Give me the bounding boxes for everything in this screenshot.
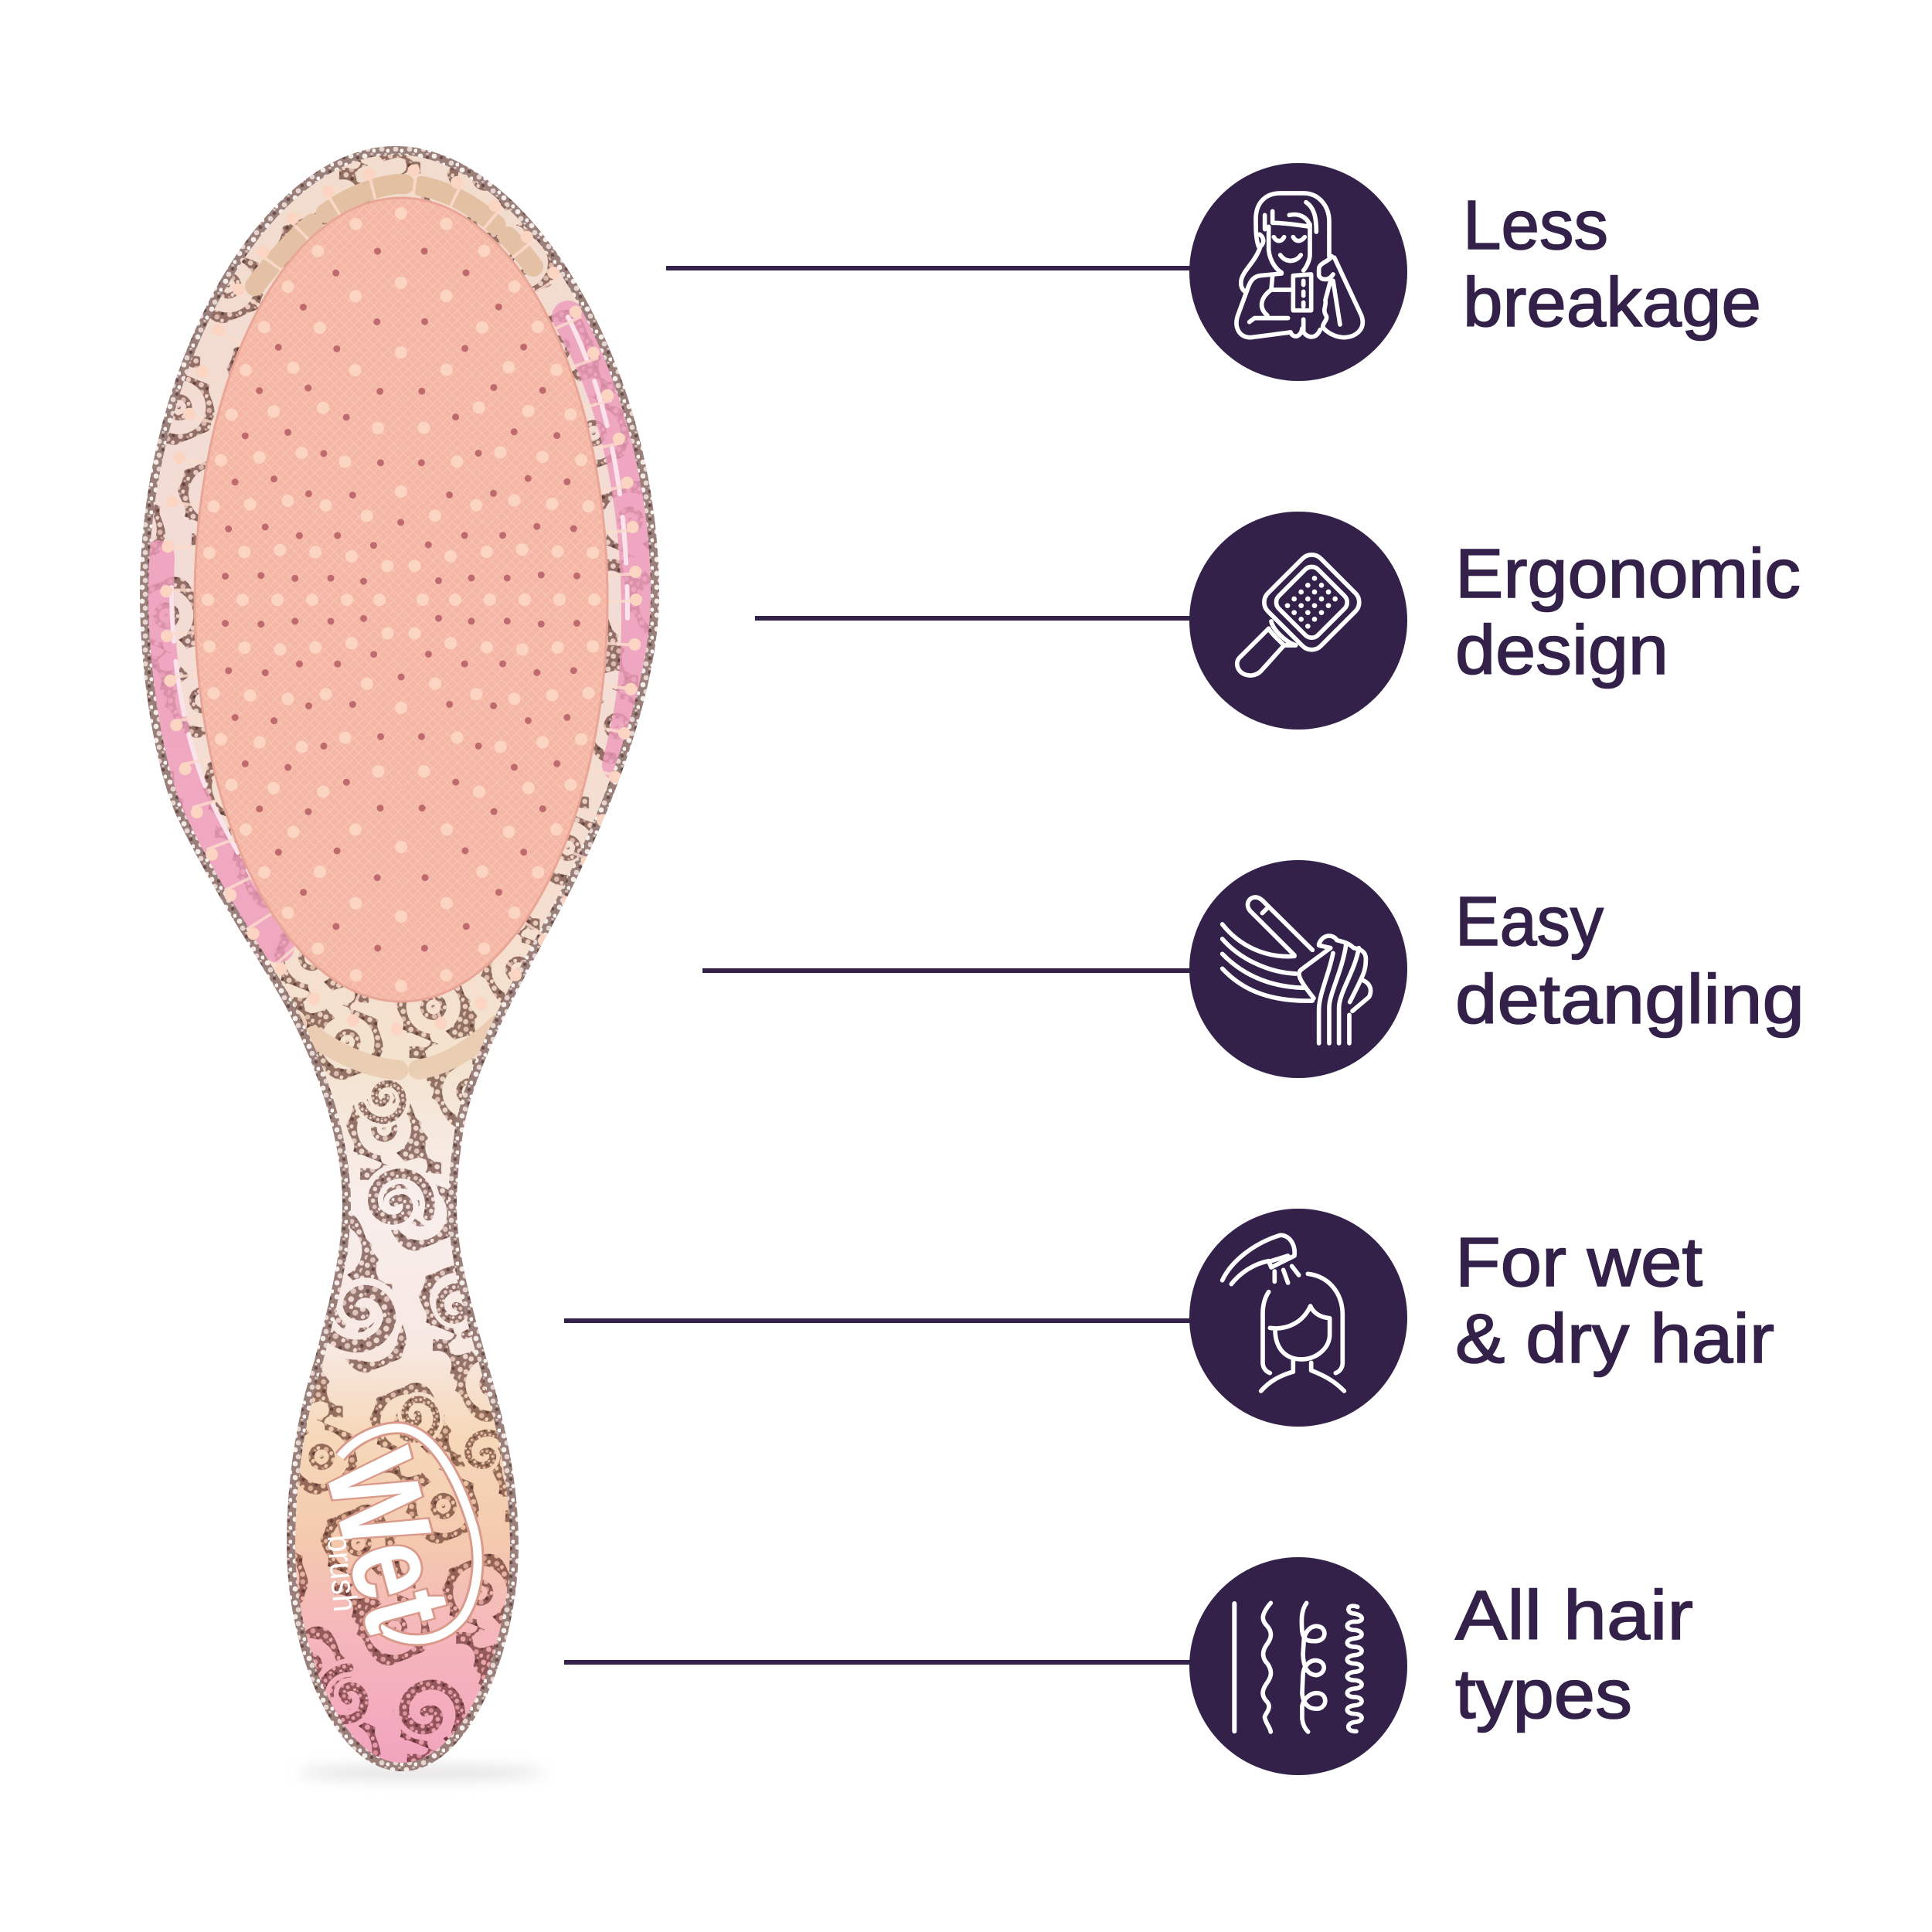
logo: Wet brush: brush [320, 1533, 364, 1614]
connector line 2 [755, 616, 1202, 621]
label: All hair types: types [1455, 1656, 1632, 1733]
label: All hair types: All hair [1455, 1577, 1693, 1655]
label: Less breakage: breakage [1463, 264, 1761, 342]
label: Ergonomic design: Ergonomic [1455, 536, 1801, 613]
brush body with ornamental pattern [140, 146, 659, 1771]
feature: all hair types [564, 1557, 1693, 1775]
feature: ergonomic design [755, 512, 1801, 730]
feature: easy detangling [702, 860, 1804, 1078]
label: For wet & dry hair: & dry hair [1455, 1301, 1774, 1378]
label: Ergonomic design: design [1455, 612, 1668, 689]
feature: less breakage [666, 163, 1761, 381]
label: Easy detangling: detangling [1455, 961, 1804, 1039]
label: Easy detangling: Easy [1455, 883, 1604, 961]
brush product photo [140, 146, 659, 1784]
connector line 5 [564, 1660, 1202, 1665]
label: For wet & dry hair: For wet [1455, 1224, 1702, 1301]
icon: shower over head [1189, 1209, 1407, 1427]
pad [195, 198, 607, 1002]
connector line 4 [564, 1318, 1202, 1323]
icon: four hair textures [1189, 1557, 1407, 1775]
label: All hair types [1455, 1577, 1693, 1733]
connector line 1 [666, 266, 1202, 270]
label: For wet & dry hair [1455, 1224, 1774, 1378]
label: Less breakage: Less [1463, 187, 1608, 264]
icon: hand holding hair with comb [1189, 860, 1407, 1078]
connector line 3 [702, 968, 1202, 973]
icon: paddle brush [1189, 512, 1407, 730]
brush shadow [298, 1766, 545, 1780]
feature: for wet and dry hair [564, 1209, 1774, 1427]
label: Less breakage [1463, 187, 1761, 342]
label: Ergonomic design [1455, 536, 1801, 689]
logo: Wet brush: Wet [298, 1437, 480, 1644]
icon: woman brushing hair [1189, 163, 1407, 381]
label: Easy detangling [1455, 883, 1804, 1039]
pad pins and holes [208, 213, 594, 986]
